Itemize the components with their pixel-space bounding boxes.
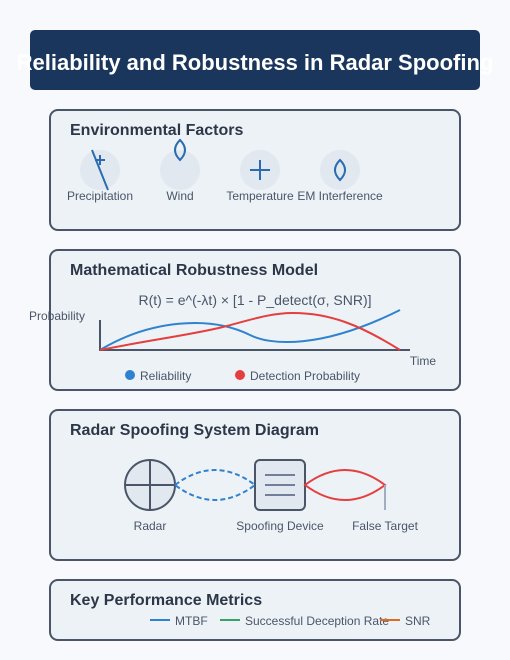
title: Reliability and Robustness in Radar Spoofing xyxy=(17,50,493,75)
icon: wind xyxy=(160,140,200,203)
heading: system diagram: Radar Spoofing System Diagram xyxy=(70,422,319,439)
false target xyxy=(352,485,419,533)
legend: SNR xyxy=(380,614,431,628)
icon: wind: Wind xyxy=(166,189,194,203)
spoofing device icon: Spoofing Device xyxy=(236,519,324,533)
line chart: Time xyxy=(410,354,436,368)
arrow: radar to device signal xyxy=(175,470,255,500)
panel: environmental factors xyxy=(50,110,460,230)
legend: MTBF xyxy=(150,614,208,628)
legend: SNR: SNR xyxy=(405,614,431,628)
false target: False Target xyxy=(352,519,419,533)
line chart: Probability xyxy=(29,309,85,323)
icon: temperature xyxy=(226,150,294,203)
radar icon xyxy=(125,460,175,533)
icon: EM interference: EM Interference xyxy=(297,189,383,203)
spoofing device icon xyxy=(236,460,324,533)
legend: reliability: Reliability xyxy=(140,369,191,383)
legend: detection probability: Detection Probability xyxy=(250,369,360,383)
panel: radar spoofing system diagram xyxy=(50,410,460,560)
heading: key performance metrics: Key Performance Metrics xyxy=(70,592,262,609)
legend: MTBF: MTBF xyxy=(175,614,208,628)
arrow: device to false target signal xyxy=(305,470,385,500)
panel: mathematical robustness model xyxy=(29,250,460,390)
panel: key performance metrics xyxy=(50,580,460,640)
legend: successful deception rate: Successful Deception Rate xyxy=(245,614,389,628)
radar icon: Radar xyxy=(134,519,166,533)
icon: EM interference xyxy=(297,150,383,203)
icon: temperature: Temperature xyxy=(226,189,294,203)
header banner xyxy=(17,30,493,90)
heading: environmental factors: Environmental Factors xyxy=(70,122,243,139)
formula: R(t) = e^(-λt) × [1 - P_detect(σ, SNR)] xyxy=(138,292,372,308)
line chart xyxy=(29,309,436,368)
icon: precipitation: Precipitation xyxy=(67,189,133,203)
icon: precipitation xyxy=(67,150,133,203)
heading: mathematical robustness model: Mathematical Robustness Model xyxy=(70,262,318,279)
